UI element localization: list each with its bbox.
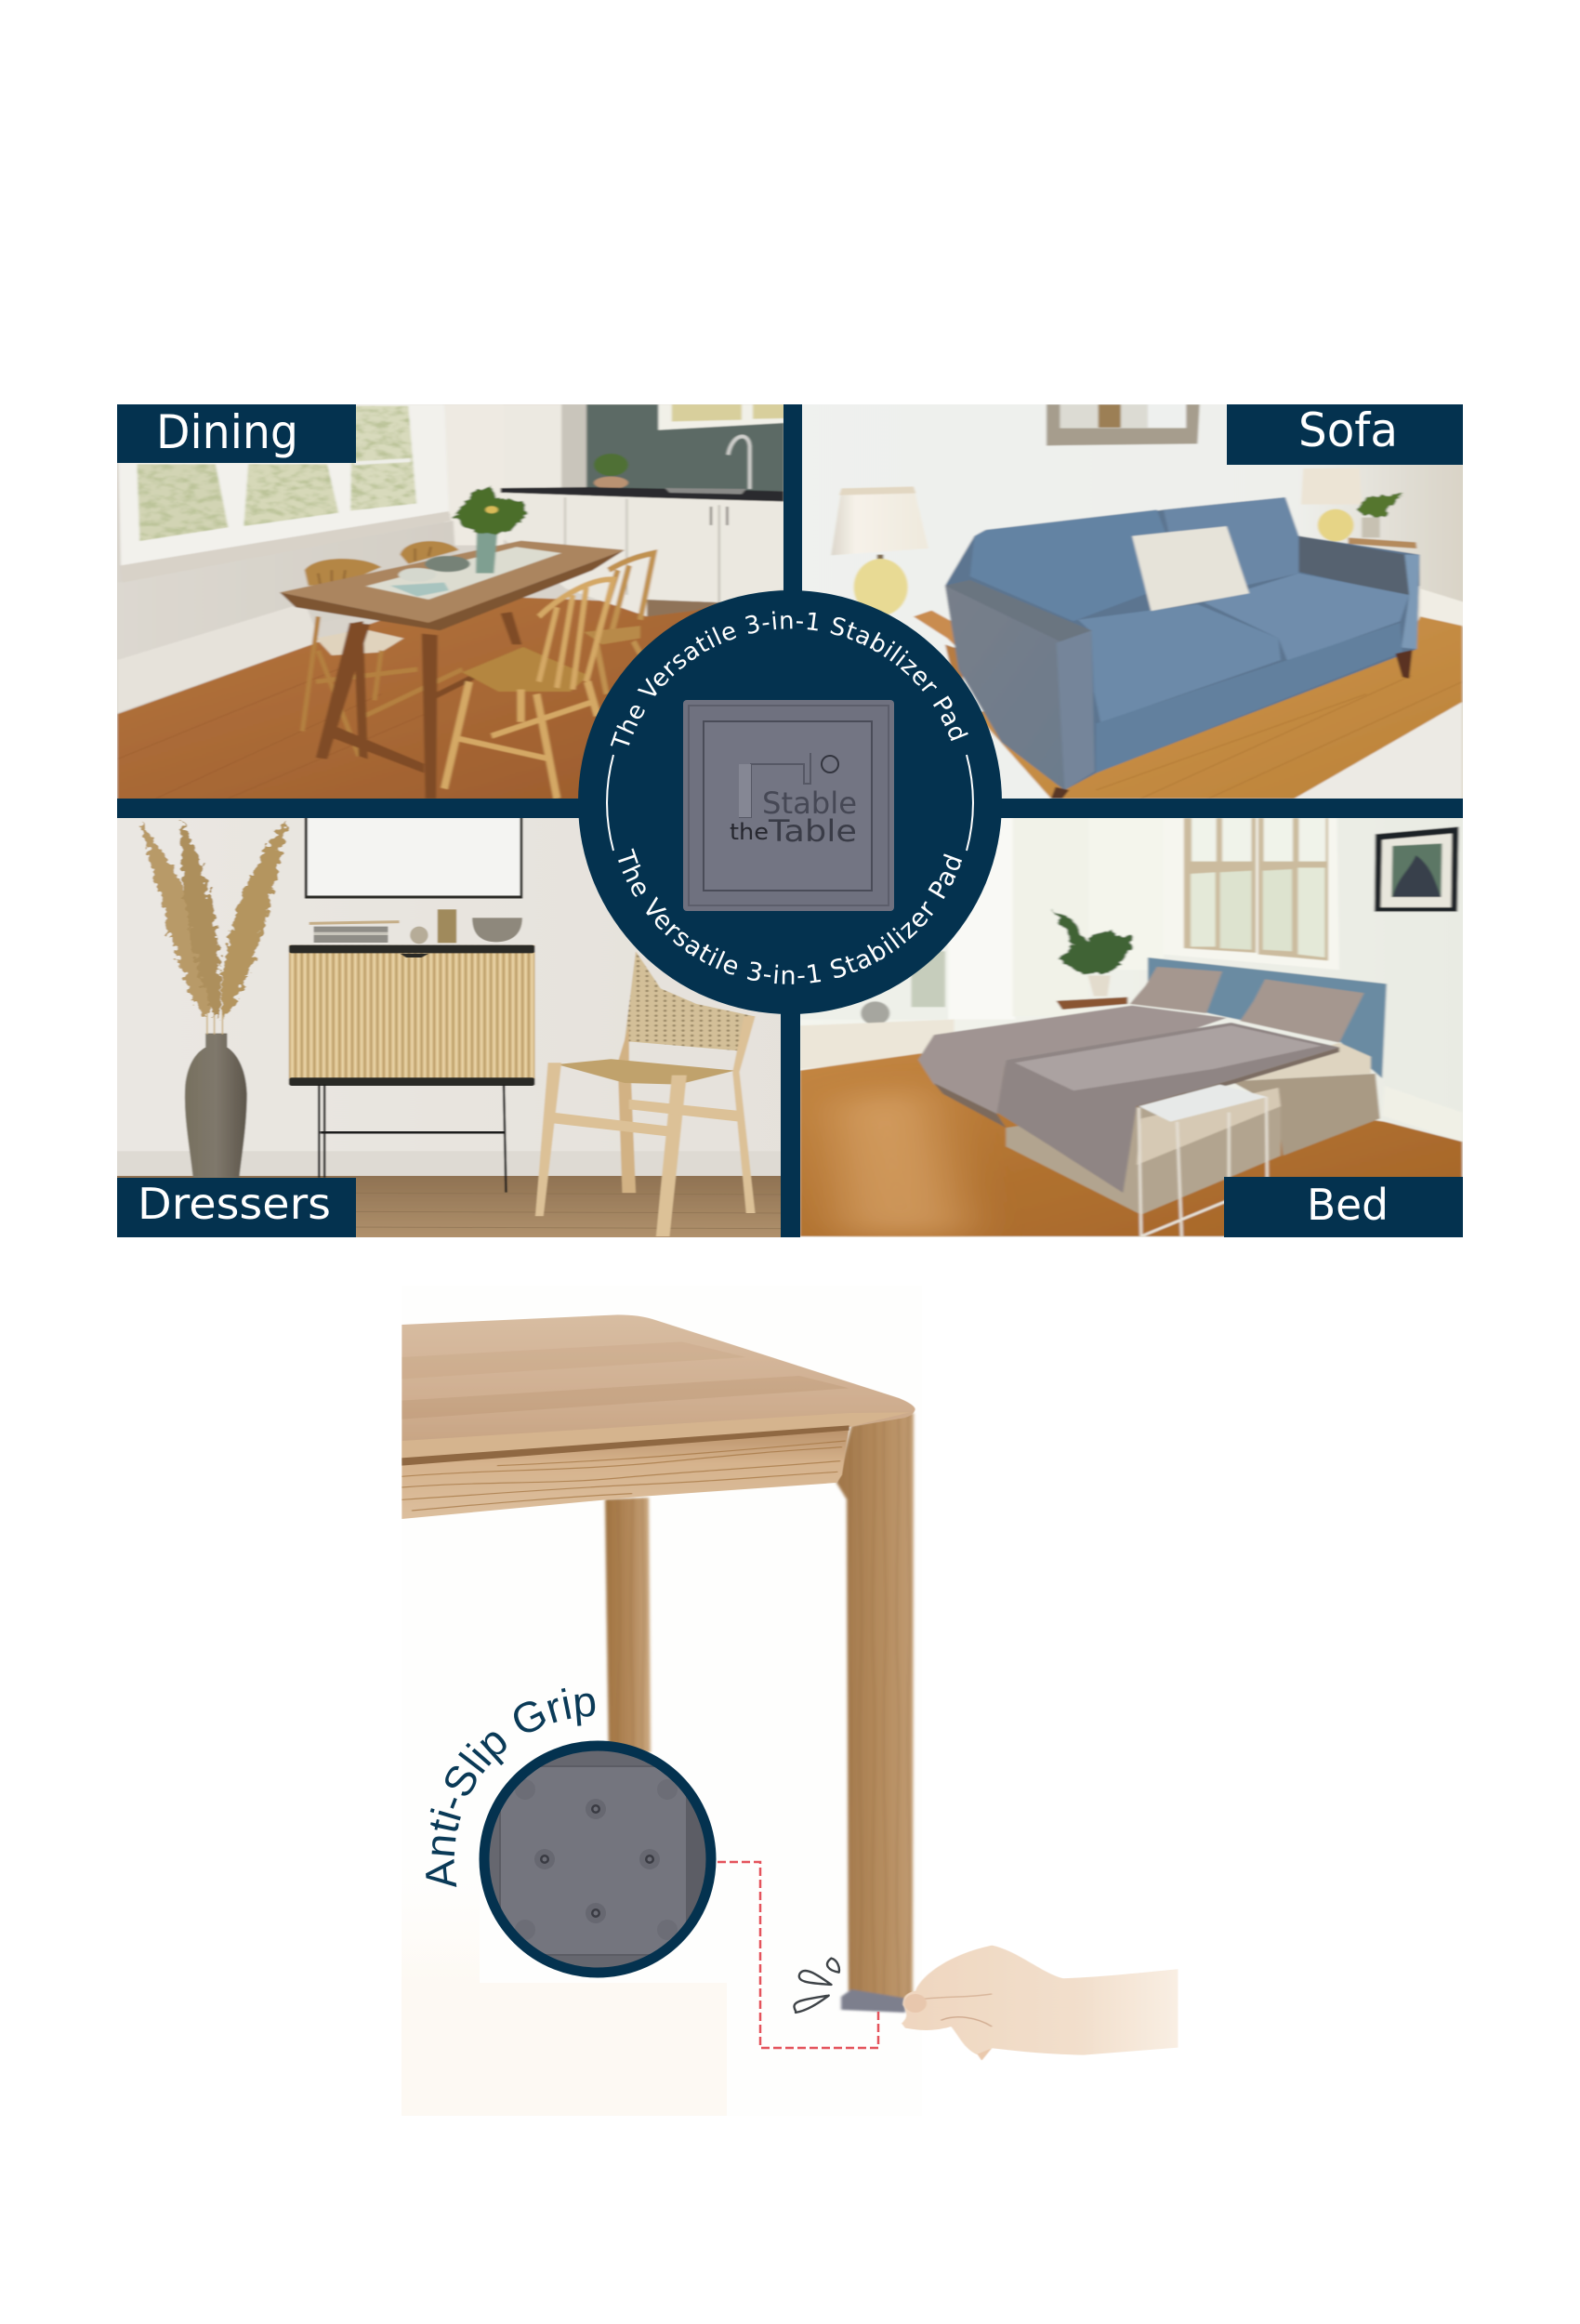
floor bbox=[974, 616, 1462, 799]
wall frame bbox=[306, 816, 521, 897]
floor reflection bbox=[835, 1088, 970, 1236]
red dashed connector bbox=[718, 1862, 878, 2048]
panel: sofa photo bbox=[781, 400, 1470, 802]
floor bbox=[799, 1053, 1462, 1236]
sofa silhouette bbox=[945, 497, 1419, 790]
duvet bbox=[918, 1006, 1227, 1116]
back chairs bbox=[305, 559, 381, 586]
mattress and skirts bbox=[1231, 1043, 1371, 1081]
wall art bbox=[1375, 826, 1458, 912]
plant bbox=[1051, 909, 1134, 973]
pad product: Stable bbox=[762, 786, 857, 821]
label: Sofa bbox=[1227, 403, 1463, 465]
pampas bbox=[140, 820, 286, 1020]
floor bbox=[117, 597, 720, 799]
navy frame bars bbox=[117, 404, 1463, 1237]
label: Bed: Bed bbox=[1307, 1180, 1389, 1230]
tabletop bbox=[402, 1314, 915, 1519]
ring lines: right bbox=[967, 755, 973, 851]
right lamp and plant bbox=[1301, 468, 1362, 505]
label: Dining bbox=[117, 404, 356, 463]
label: Dressers: Dressers bbox=[138, 1179, 331, 1229]
glass side table bbox=[1139, 1085, 1267, 1122]
chair bbox=[625, 951, 755, 1051]
window bbox=[117, 404, 449, 565]
pad product bbox=[683, 700, 894, 911]
label: Dressers bbox=[117, 1178, 356, 1237]
table legs bbox=[605, 1413, 914, 2013]
pillow bbox=[1132, 526, 1249, 611]
pad product: the bbox=[730, 819, 769, 845]
objects bbox=[314, 927, 388, 943]
label: Bed bbox=[1224, 1177, 1463, 1237]
central badge bbox=[578, 590, 1002, 1014]
back cushions bbox=[1164, 497, 1298, 586]
ring text: lower bbox=[616, 854, 964, 984]
ring text: upper bbox=[627, 628, 955, 751]
left arm bbox=[945, 580, 1094, 790]
label: Dining: Dining bbox=[156, 405, 298, 459]
kitchen bbox=[586, 404, 784, 491]
left lamp and table bbox=[831, 486, 928, 555]
left window bbox=[799, 945, 948, 1020]
label: Sofa: Sofa bbox=[1298, 403, 1398, 457]
hand holding pad bbox=[902, 1946, 1178, 2061]
pillows bbox=[1130, 967, 1222, 1013]
pad underside bbox=[500, 1766, 718, 1955]
panel: dining photo bbox=[111, 400, 796, 802]
right chairs bbox=[597, 553, 653, 694]
caption: Anti-Slip Grip: Anti-Slip Grip bbox=[426, 1688, 595, 1887]
upper ring caption: The Versatile 3-in-1 Stabilizer Pad bbox=[610, 611, 968, 746]
table bbox=[280, 541, 625, 623]
panel: dressers photo bbox=[111, 815, 786, 1238]
cream backdrop bbox=[402, 1286, 922, 2116]
pad product: Table bbox=[768, 813, 857, 849]
cabinet bbox=[289, 945, 534, 1085]
table legs bbox=[316, 612, 521, 799]
baseboard bbox=[1382, 1086, 1462, 1142]
lower ring caption: The Versatile 3-in-1 Stabilizer Pad bbox=[618, 848, 963, 984]
mirror bbox=[1047, 404, 1200, 445]
base bbox=[1096, 623, 1402, 773]
panel: table product photo bbox=[402, 1286, 1178, 2116]
seats bbox=[1205, 574, 1409, 662]
anti-slip arc path bbox=[454, 1716, 600, 1887]
right arm back bbox=[1298, 536, 1419, 597]
panel: bed photo bbox=[781, 815, 1470, 1239]
ring lines: left bbox=[607, 755, 613, 851]
right window bbox=[1164, 818, 1339, 970]
flowers and vase bbox=[476, 532, 497, 574]
headboard bbox=[1148, 957, 1387, 1078]
icon: squeak marks bbox=[794, 1959, 839, 2013]
anti-slip callout circle bbox=[484, 1746, 718, 1973]
vase bbox=[185, 1034, 247, 1178]
curtains bbox=[947, 815, 1015, 1020]
